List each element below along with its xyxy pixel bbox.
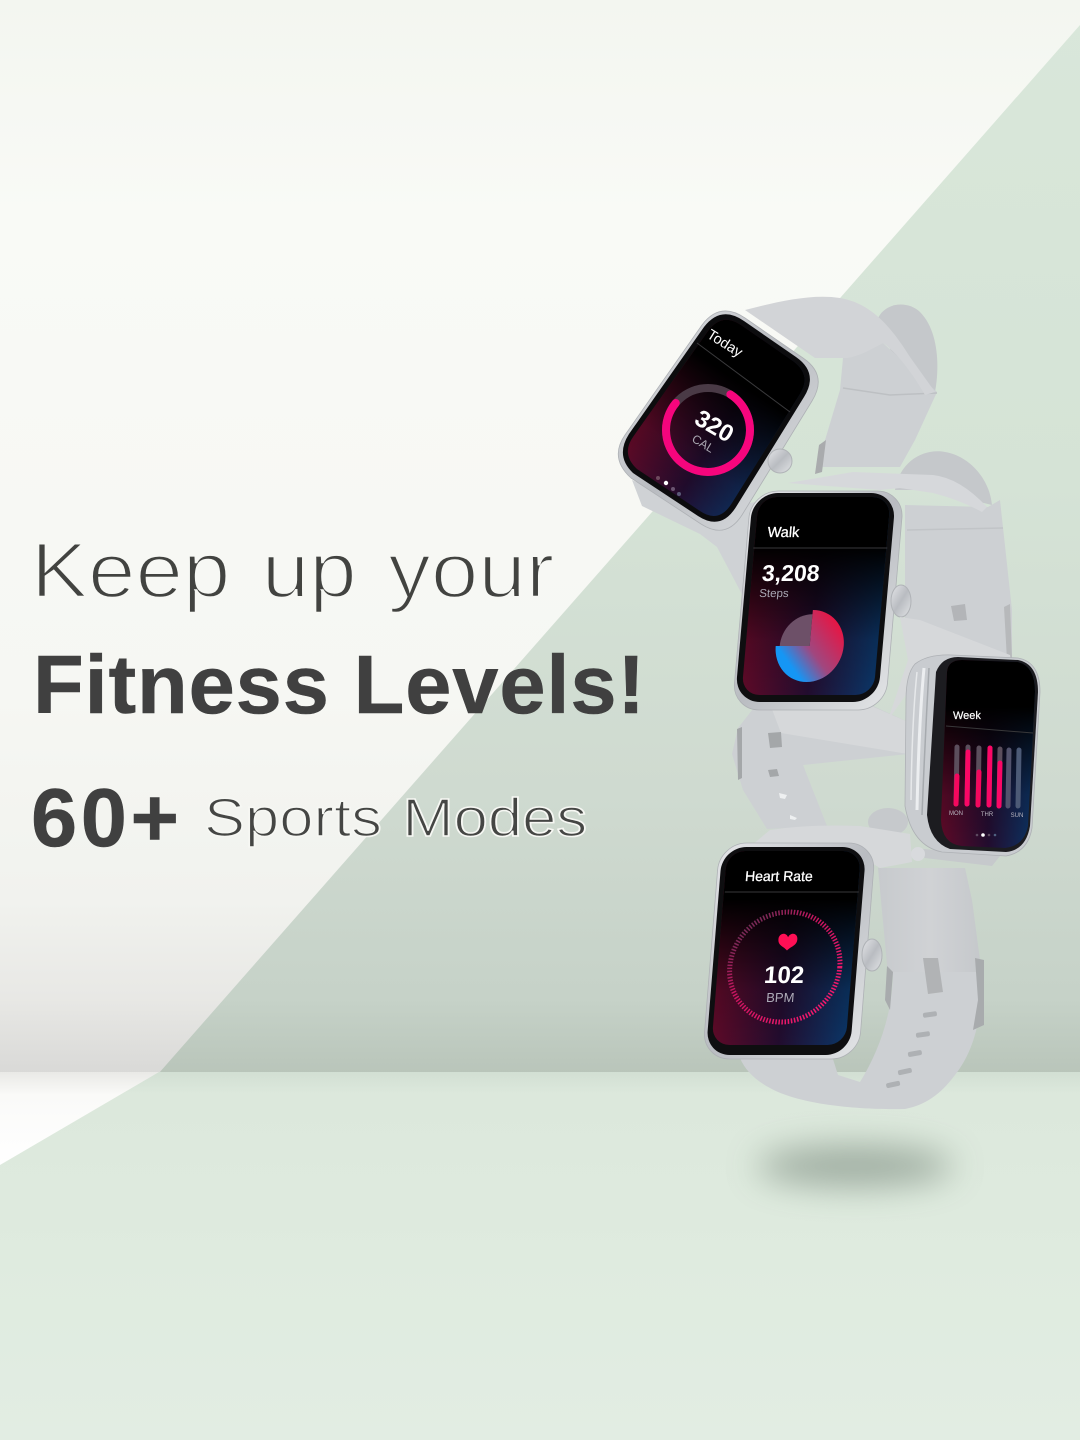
screen title: Walk: Walk (767, 525, 801, 541)
screen (941, 660, 1035, 848)
icon: heart (778, 934, 798, 950)
background: green diagonal wall panel (159, 25, 1080, 1073)
case (905, 655, 1040, 856)
case edge highlights (911, 672, 917, 800)
calorie value: 320: 320 (690, 405, 738, 448)
strap tail ear (895, 451, 992, 505)
strap upper band (788, 472, 987, 512)
lug pin (911, 847, 925, 861)
bottom strap lip (913, 848, 1000, 866)
pie chart (773, 610, 847, 682)
screen (623, 314, 810, 522)
screen (735, 493, 896, 702)
heart rate tick ring (725, 912, 844, 1022)
strap lower band (732, 700, 908, 829)
strap upper band (745, 297, 935, 395)
step count: 3,208: 3,208 (761, 560, 821, 586)
strap tail ear (868, 808, 908, 836)
shadow under watches (757, 1146, 953, 1186)
background: mint floor (0, 1072, 1080, 1440)
strap upper band (752, 826, 912, 868)
calorie unit: CAL: CAL (689, 432, 717, 456)
bezel (927, 657, 1038, 852)
page dots (976, 833, 996, 837)
step label: Steps (759, 588, 789, 600)
crown (891, 585, 911, 617)
chart day labels: SUN (1011, 813, 1023, 819)
watch 2: Walk steps (732, 451, 1012, 829)
watch 1: Today calories (618, 297, 937, 600)
strap lower band (740, 972, 980, 1109)
label: Sports Modes: Sports Modes (204, 788, 587, 848)
calorie ring (666, 388, 750, 472)
case (618, 311, 818, 530)
strap keeper (923, 958, 943, 994)
strap back section (817, 343, 937, 467)
watch 3: Week bars (888, 617, 1040, 866)
heading line: Fitness Levels!: Fitness Levels! (33, 638, 645, 731)
screen title: Week: Week (953, 710, 981, 722)
heart rate value: 102: 102 (763, 962, 805, 989)
strap keeper (951, 604, 967, 621)
screen (706, 847, 866, 1055)
screen title: Heart Rate: Heart Rate (744, 868, 814, 884)
chart day labels (949, 811, 1023, 819)
weekly bar chart (956, 747, 1019, 806)
stat: 60+: 60+ (31, 771, 179, 864)
top lug band (888, 617, 1012, 720)
strap lower band (632, 480, 790, 600)
strap back section (878, 868, 982, 975)
crown (862, 939, 882, 971)
background: white wall panel (0, 0, 1080, 1073)
chart day labels: THR (981, 812, 994, 818)
strap tail ear (877, 305, 937, 392)
screen title: Today: Today (704, 327, 746, 361)
chart day labels: MON (949, 811, 963, 817)
buckle (1004, 604, 1012, 660)
crown (768, 449, 792, 473)
watch 4: Heart Rate (702, 808, 984, 1109)
heart rate unit: BPM: BPM (766, 990, 795, 1005)
background: white floor wedge (0, 1072, 159, 1165)
lower strap buckle and keeper marks (737, 727, 782, 780)
page dots (656, 476, 681, 496)
buckle (973, 958, 984, 1030)
heading line: Keep up your: Keep up your (31, 527, 554, 614)
strap back section (905, 500, 1012, 662)
case (732, 491, 904, 710)
strap holes (886, 1011, 937, 1088)
buckle (815, 440, 826, 474)
case (702, 843, 876, 1059)
